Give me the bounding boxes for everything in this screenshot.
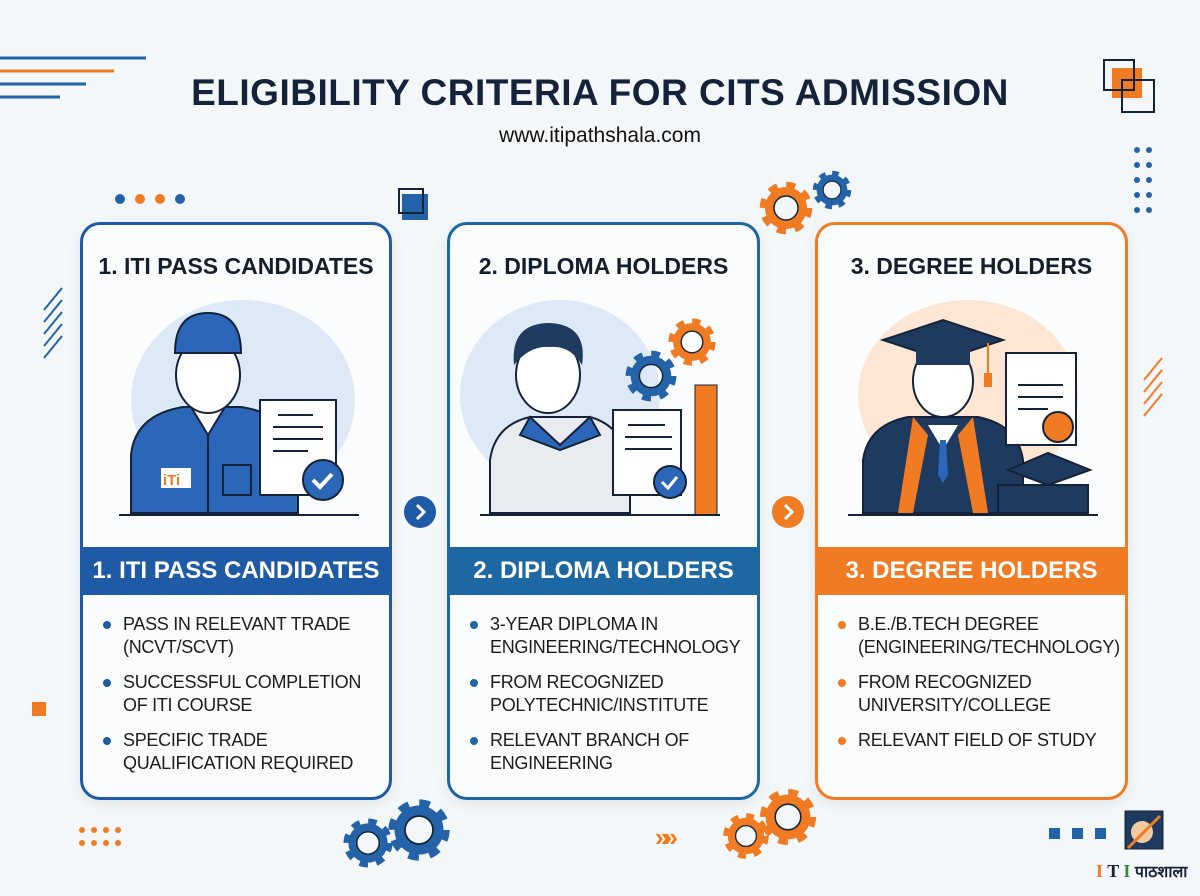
bullet list: SUCCESSFUL COMPLETION: [123, 672, 361, 692]
bullet list: 3-YEAR DIPLOMA IN: [490, 614, 658, 634]
bullet list: ENGINEERING/TECHNOLOGY: [490, 637, 740, 657]
bullet list: FROM RECOGNIZED: [858, 672, 1032, 692]
card heading: 2. DIPLOMA HOLDERS: [479, 253, 728, 279]
panel: Diploma holders: [447, 222, 760, 800]
header bar: [450, 547, 757, 595]
bullet list: [103, 614, 361, 773]
chevrons: »»: [655, 822, 672, 852]
gears bottom middle: [723, 789, 816, 859]
title: ELIGIBILITY CRITERIA FOR CITS ADMISSION: [191, 72, 1009, 113]
bullet list: OF ITI COURSE: [123, 695, 252, 715]
header bar: 2. DIPLOMA HOLDERS: [473, 557, 734, 584]
header bar: 3. DEGREE HOLDERS: [845, 557, 1098, 584]
logo: ITI pathshala: [1096, 810, 1188, 881]
gears bottom left: [344, 799, 450, 868]
bullet list: SPECIFIC TRADE: [123, 730, 268, 750]
bullet list: ENGINEERING: [490, 753, 613, 773]
header bar: 1. ITI PASS CANDIDATES: [92, 557, 380, 584]
header bar: [818, 547, 1125, 595]
decorative dots: [1134, 147, 1152, 213]
panel: Degree holders: [815, 222, 1128, 800]
gears top: [760, 170, 852, 234]
illustration: ITI worker with certificate: iTi: [163, 472, 180, 489]
bullet list: (ENGINEERING/TECHNOLOGY): [858, 637, 1120, 657]
bullet list: QUALIFICATION REQUIRED: [123, 753, 353, 773]
bullet list: PASS IN RELEVANT TRADE: [123, 614, 350, 634]
bullet list: B.E./B.TECH DEGREE: [858, 614, 1039, 634]
bottom decorations: [79, 827, 121, 846]
logo: ITI pathshala: I T I पाठशाला: [1096, 861, 1187, 881]
bullet list: POLYTECHNIC/INSTITUTE: [490, 695, 708, 715]
bullet list: [470, 614, 740, 773]
header bar: [83, 547, 389, 595]
card heading: 1. ITI PASS CANDIDATES: [98, 253, 374, 279]
bullet list: UNIVERSITY/COLLEGE: [858, 695, 1051, 715]
illustration: ITI worker with certificate: [119, 300, 359, 516]
bullet list: (NCVT/SCVT): [123, 637, 234, 657]
decorative squares top-right: [1103, 59, 1155, 113]
illustration: diploma holder with gears and ruler: [460, 300, 720, 516]
panel: ITI pass candidates: [80, 222, 392, 800]
card heading: 3. DEGREE HOLDERS: [851, 253, 1092, 279]
website url: www.itipathshala.com: [499, 124, 701, 147]
decorative lines top-left: [0, 56, 146, 98]
bullet list: RELEVANT FIELD OF STUDY: [858, 730, 1096, 750]
bullet list: [838, 614, 1120, 750]
arrow 1: [404, 496, 436, 528]
bullet list: RELEVANT BRANCH OF: [490, 730, 689, 750]
arrow 2: [772, 496, 804, 528]
bullet list: FROM RECOGNIZED: [490, 672, 664, 692]
illustration: graduate with certificate and books: [848, 300, 1098, 516]
